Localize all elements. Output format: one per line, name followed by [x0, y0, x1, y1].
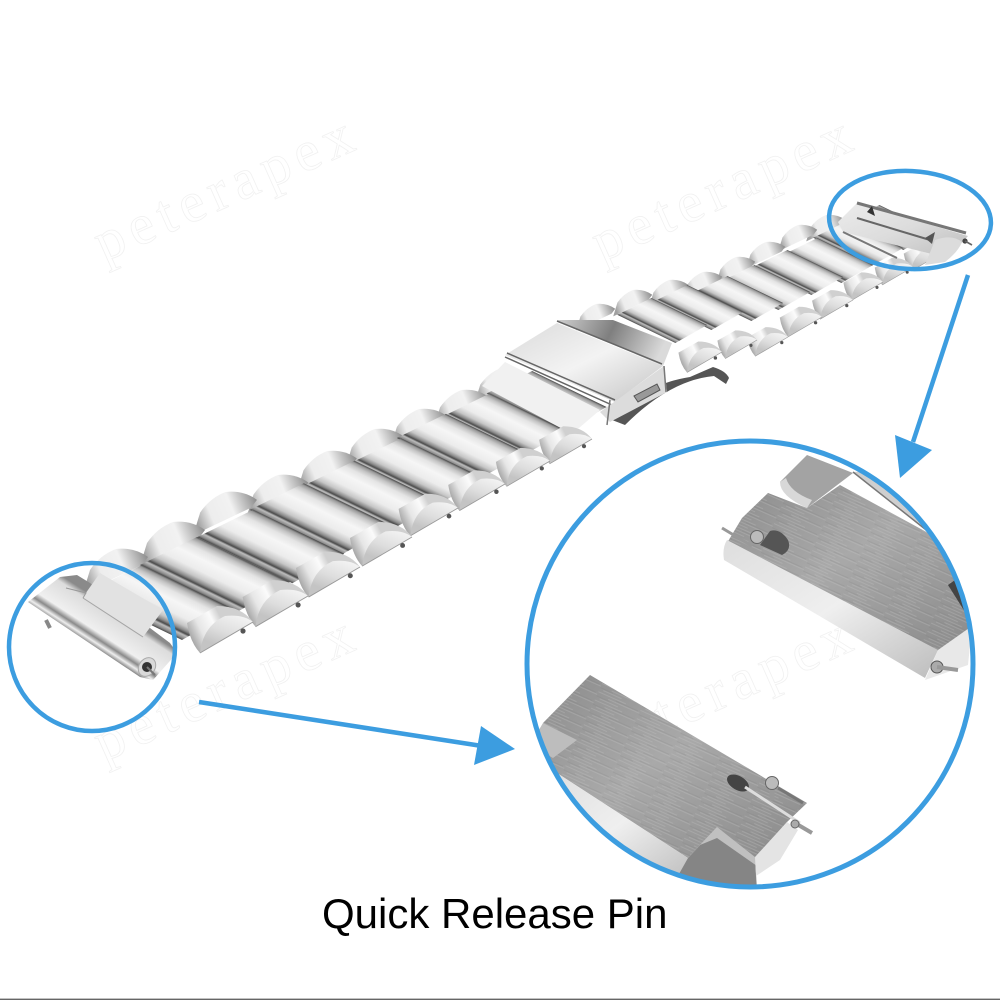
detail: lower link piece [530, 675, 812, 890]
watermarks: peterapex [84, 101, 369, 274]
callout circle: left band end [9, 563, 175, 731]
right band caps [576, 215, 845, 330]
left end link with spring pin [28, 573, 177, 680]
watch band: fold-over clasp [505, 320, 729, 425]
arrow: left circle to detail [199, 702, 515, 765]
watch band: right section [576, 203, 972, 372]
bottom edge line [0, 999, 1000, 1000]
clasp top plate [505, 323, 663, 402]
right end link [838, 203, 972, 265]
right band centre pieces [617, 205, 935, 343]
left band centre pieces [85, 371, 607, 640]
watermarks [84, 101, 867, 774]
caption: Quick Release Pin [322, 890, 668, 937]
callout ellipse: right band end [827, 167, 993, 273]
clasp side and button [600, 366, 667, 422]
watermarks: peterapex [582, 601, 867, 774]
left band caps [83, 368, 527, 593]
clasp tail [612, 367, 729, 425]
arrow: right ellipse to detail [895, 275, 968, 478]
right band outer half-moons [678, 244, 942, 372]
detail: upper link piece [722, 455, 975, 680]
detail magnifier circle [527, 441, 975, 890]
watermarks: peterapex [84, 601, 369, 774]
left band outer half-moons [187, 426, 592, 653]
watch band: left section [28, 362, 607, 680]
watermarks: peterapex [582, 101, 867, 274]
plate under clasp [482, 362, 600, 434]
